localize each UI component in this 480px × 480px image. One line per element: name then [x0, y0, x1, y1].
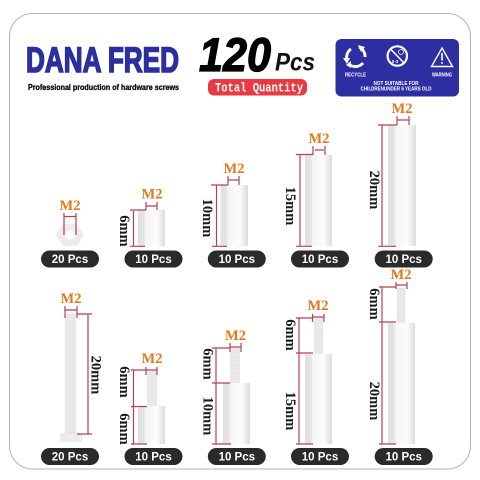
item: 20mm screw [41, 291, 104, 465]
item: 10mm spacer: 10mm [199, 199, 215, 237]
item: 20mm screw: 20 Pcs [52, 452, 88, 464]
item: 6mm + 20mm standoff [366, 267, 433, 465]
item: 15mm spacer: M2 [309, 131, 329, 147]
item: 6mm + 10mm standoff: M2 [225, 328, 246, 344]
age notice: NOT SUITABLE FOR [374, 81, 419, 87]
total count heading: Pcs [275, 48, 315, 76]
icon: not suitable for small children: 0-3 [392, 59, 399, 64]
item: 6mm + 20mm standoff: 10 Pcs [385, 452, 422, 464]
item: 6mm + 15mm standoff [282, 298, 349, 465]
icon: warning triangle [432, 48, 452, 66]
item: 10mm spacer [199, 161, 266, 268]
item: 6mm + 6mm standoff [116, 351, 182, 465]
total quantity badge: Total Quantity [215, 82, 303, 96]
item: 6mm + 20mm standoff: M2 [391, 267, 411, 283]
item: 6mm + 6mm standoff: 10 Pcs [135, 452, 172, 464]
icon: recycle [343, 45, 365, 68]
brand title: DANA FRED [26, 41, 179, 80]
item: 6mm spacer: M2 [142, 186, 162, 202]
item: 6mm + 20mm standoff: 20mm [366, 382, 382, 420]
item: 15mm spacer: 10 Pcs [302, 254, 338, 266]
total count heading: 120 [199, 28, 271, 81]
item: 15mm spacer [282, 131, 349, 268]
item: 6mm spacer: 6mm [116, 215, 132, 247]
recycle label: RECYCLE [345, 72, 366, 78]
item: 6mm spacer: 10 Pcs [135, 254, 172, 266]
total count heading [199, 28, 315, 81]
item: 10mm spacer: 10 Pcs [219, 254, 255, 266]
item: 15mm spacer: 15mm [282, 187, 298, 225]
item: 6mm + 15mm standoff: 6mm [282, 319, 298, 351]
item: 6mm + 15mm standoff: M2 [308, 298, 328, 314]
panel: safety notices [336, 39, 459, 96]
item: M2 hex nut: 20 Pcs [52, 254, 88, 266]
item: 6mm + 6mm standoff: 6mm [116, 366, 132, 398]
item: 6mm + 20mm standoff: 6mm [366, 288, 382, 320]
item: 6mm + 10mm standoff: 10 Pcs [219, 452, 255, 464]
item: 6mm + 10mm standoff: 6mm [200, 348, 216, 380]
age notice: CHILDRENUNDER 6 YEARS OLD [360, 86, 432, 92]
item: M2 hex nut [41, 198, 99, 268]
item: 20mm screw: M2 [61, 291, 81, 307]
item: 20mm spacer: 10 Pcs [385, 254, 422, 266]
item: 20mm spacer [366, 101, 433, 268]
item: 6mm + 6mm standoff: 6mm [116, 413, 132, 445]
item: 6mm + 6mm standoff: M2 [142, 351, 162, 367]
item: 6mm spacer [116, 186, 182, 268]
warning label: WARNING [432, 72, 452, 78]
age notice [360, 81, 432, 92]
item: 20mm spacer: 20mm [366, 171, 382, 209]
item: 6mm + 15mm standoff: 10 Pcs [302, 452, 338, 464]
item: 6mm + 10mm standoff [200, 328, 266, 465]
item: 20mm screw: 20mm [88, 356, 104, 394]
brand subtitle: Professional production of hardware screws [28, 83, 179, 92]
item: 10mm spacer: M2 [224, 161, 244, 177]
item: 20mm spacer: M2 [392, 101, 412, 117]
item: 6mm + 10mm standoff: 10mm [200, 397, 216, 435]
item: 6mm + 15mm standoff: 15mm [282, 392, 298, 430]
item: M2 hex nut: M2 [60, 198, 80, 214]
